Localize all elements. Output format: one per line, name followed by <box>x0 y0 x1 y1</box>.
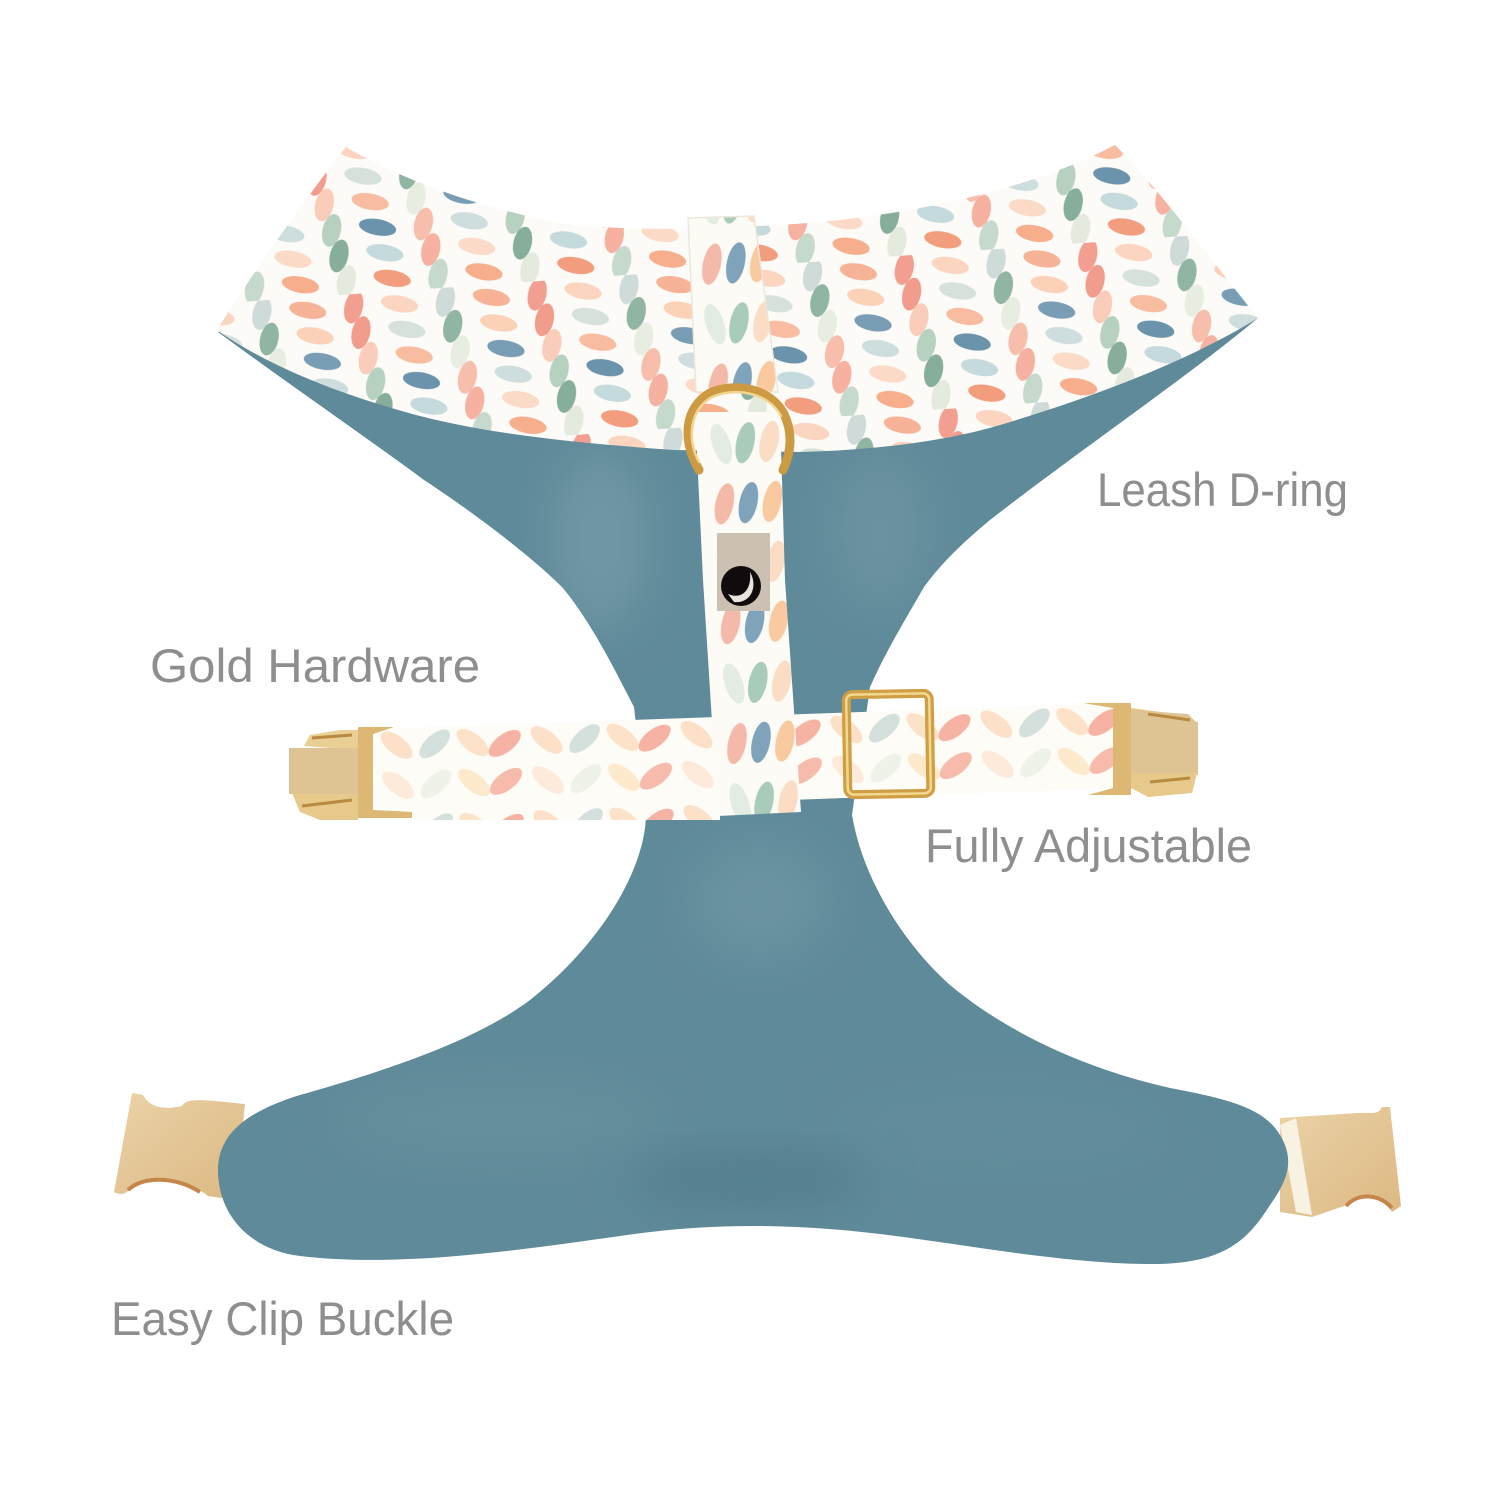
left chest clip buckle <box>114 1093 245 1200</box>
gold slide adjuster <box>846 693 931 795</box>
upper vertical strap <box>688 216 778 392</box>
harness illustration <box>114 145 1401 1264</box>
brand tag <box>717 533 770 611</box>
label: Easy Clip Buckle: Easy Clip Buckle <box>111 1292 454 1345</box>
lower back horizontal strap layer <box>400 795 720 820</box>
leash D-ring <box>688 388 790 470</box>
right strap buckle <box>1083 703 1198 797</box>
label: Fully Adjustable: Fully Adjustable <box>925 819 1252 872</box>
lower vertical strap <box>695 412 801 816</box>
patterned collar panel <box>217 145 1258 452</box>
label: Gold Hardware: Gold Hardware <box>150 639 480 692</box>
right chest clip buckle <box>1280 1107 1401 1217</box>
horizontal adjustable strap <box>370 703 1122 815</box>
infographic canvas <box>114 145 1401 1345</box>
left strap buckle <box>289 727 412 820</box>
teal velvet body <box>218 250 1288 1264</box>
label: Leash D-ring: Leash D-ring <box>1097 463 1348 516</box>
